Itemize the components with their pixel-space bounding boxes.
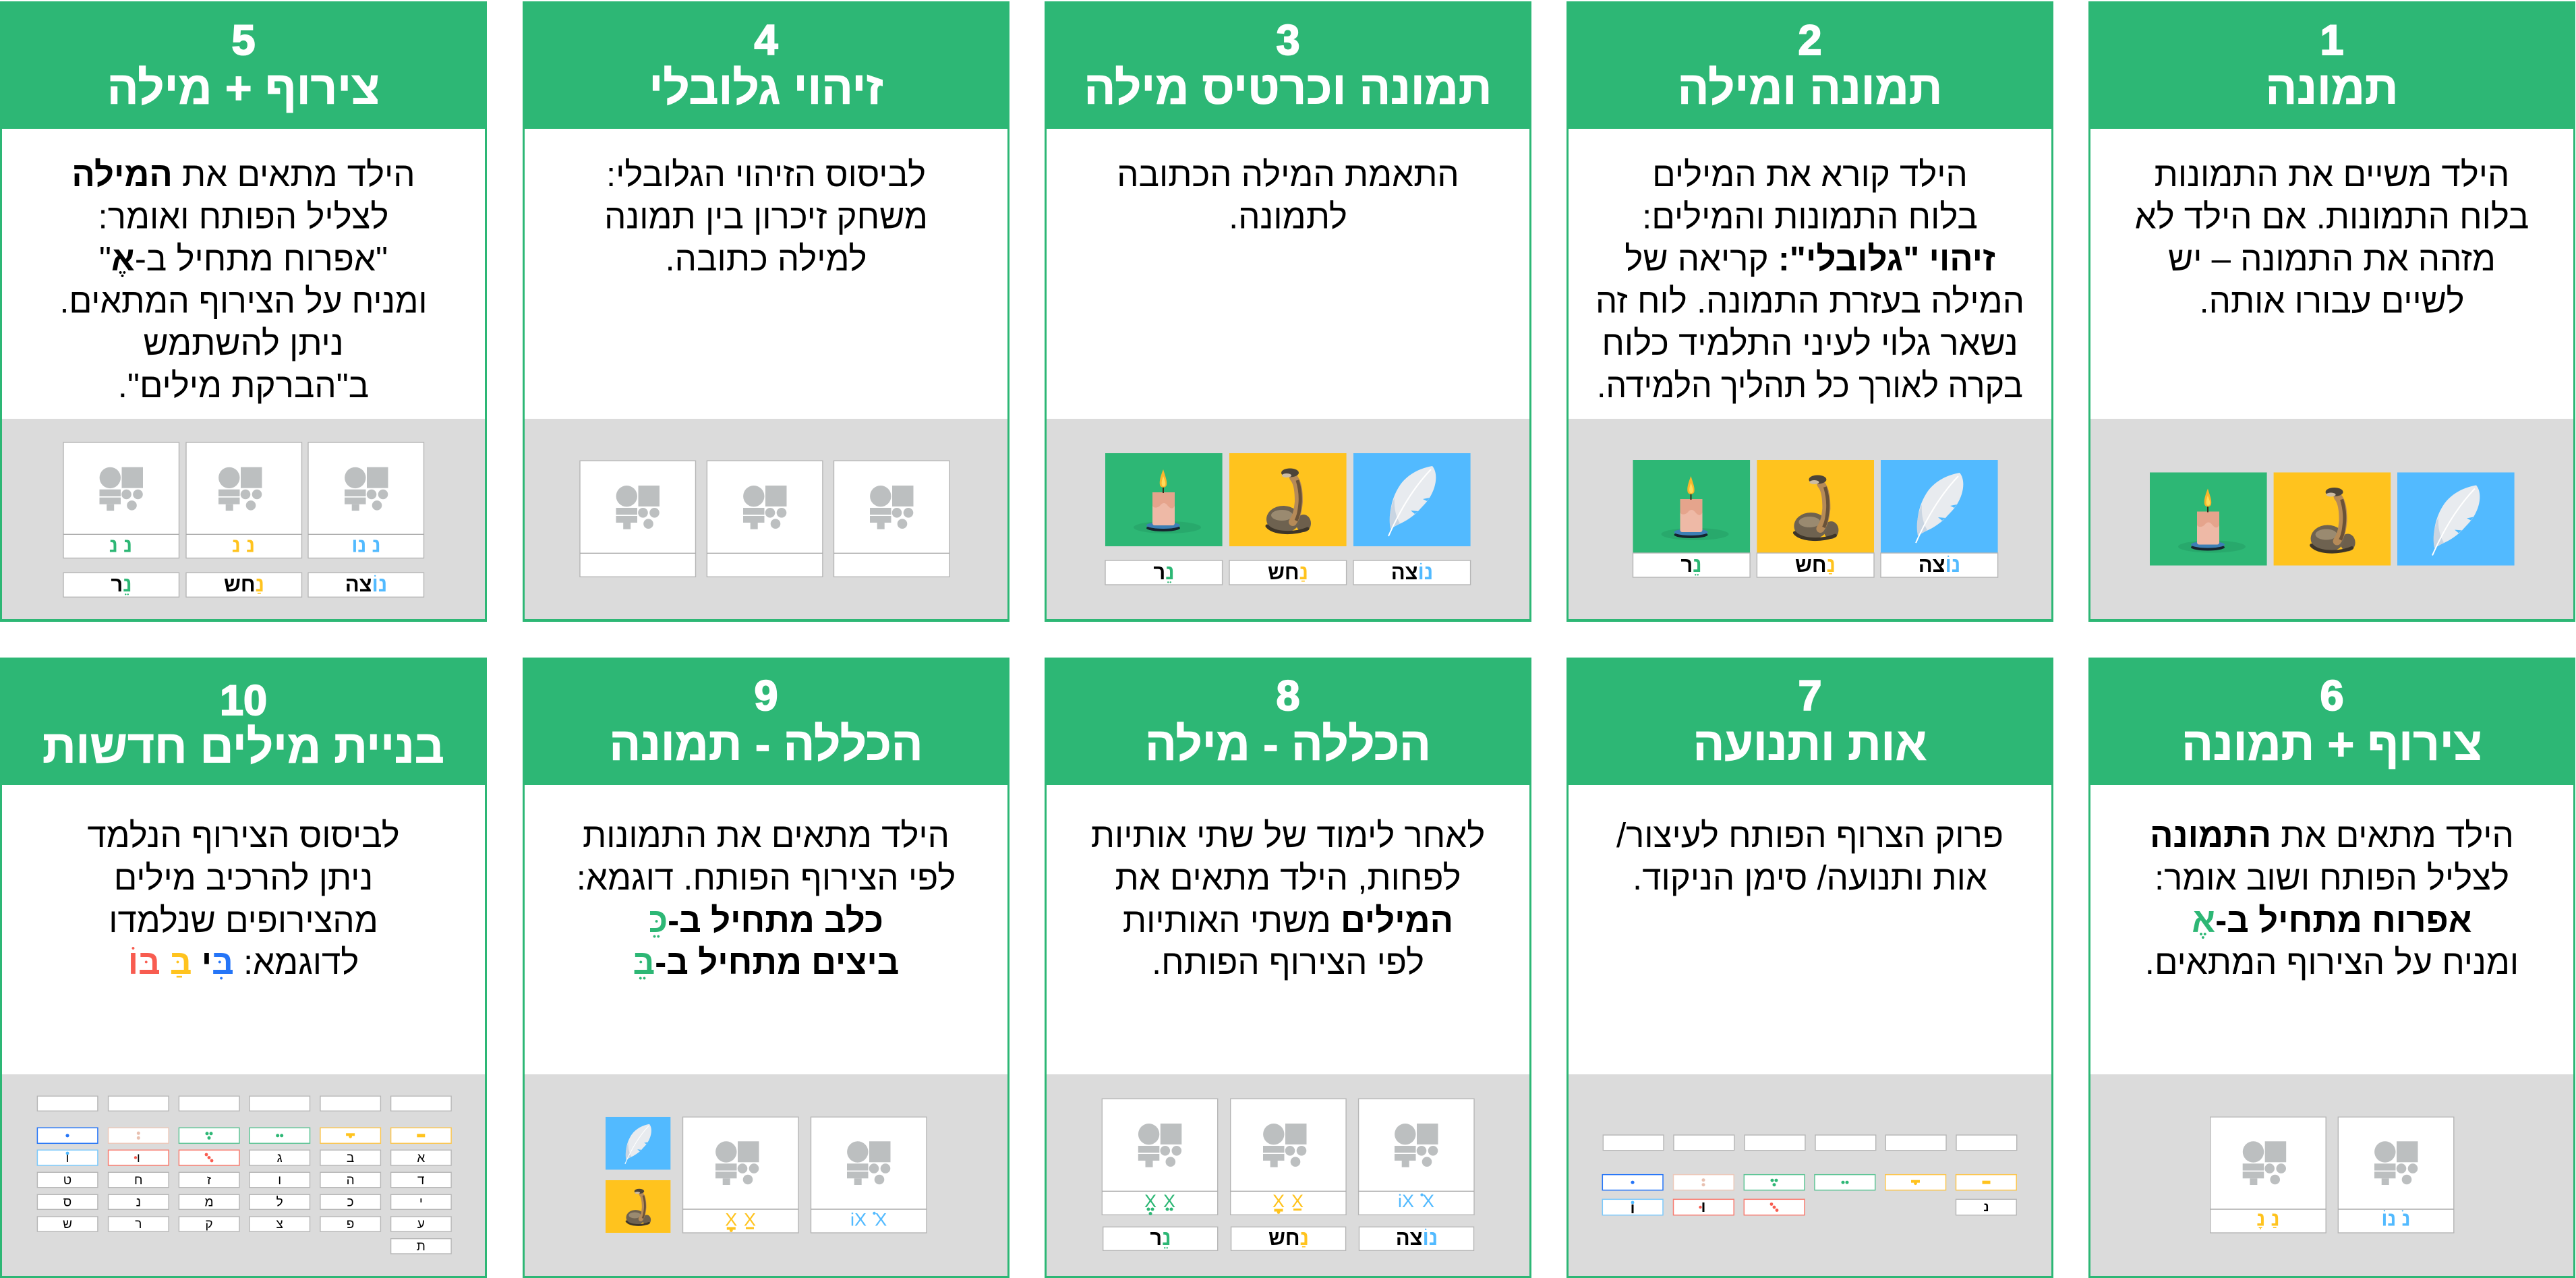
word card: snake: [1231, 1226, 1346, 1250]
step 9 description: כלב מתחיל ב-כֵּ: [649, 901, 883, 939]
syllable card yellow: X: [1291, 1191, 1304, 1211]
syllable card yellow: [2211, 1117, 2326, 1233]
alphabet tiles: מ: [204, 1195, 214, 1210]
picture: feather: [2397, 472, 2515, 565]
step 3 description: [1117, 155, 1459, 236]
alphabet tiles: ב: [347, 1151, 354, 1165]
step 1 description: לשיים עבורו אותה.: [2199, 282, 2465, 320]
word card: feather: נוֹצה: [345, 573, 387, 596]
step 4 description: משחק זיכרון בין תמונה: [604, 197, 928, 236]
step 2 description: [1596, 155, 2024, 405]
panel: step 2 picture and word: [1567, 1, 2053, 622]
step title: הכללה - תמונה: [609, 718, 923, 770]
step 6 description: ומניח על הצירוף המתאים.: [2145, 943, 2519, 981]
step 7 example area: [1569, 1074, 2051, 1276]
step title: הכללה - מילה: [1145, 718, 1431, 770]
step 1 description: הילד משיים את התמונות: [2155, 155, 2509, 194]
step 1 example area: [2090, 419, 2573, 619]
picture: snake: [2274, 472, 2391, 565]
alphabet tiles: ע: [417, 1217, 425, 1231]
vowel and letter tiles second row: נ: [1983, 1200, 1989, 1215]
empty slots row: [1603, 1135, 2017, 1151]
word card: snake: נַחש: [1268, 560, 1308, 584]
step 9 description: [577, 816, 956, 981]
word card: snake: נַחש: [1268, 1226, 1309, 1250]
step 10 header: [0, 658, 487, 785]
panel: step 5 syllable and word: [0, 1, 487, 622]
alphabet tiles: ו: [66, 1151, 69, 1165]
step 8 description: [1091, 816, 1485, 981]
alphabet tiles: ח: [134, 1173, 143, 1188]
memory card 1: [580, 461, 696, 577]
syllable card yellow: X: [744, 1210, 756, 1230]
word card: feather: נוֹצה: [1391, 560, 1433, 584]
syllable card blue: [1359, 1099, 1474, 1215]
memory card 3: [833, 461, 949, 577]
alphabet tiles: ש: [63, 1217, 72, 1231]
alphabet tiles: ז: [207, 1173, 211, 1188]
step 10 description: מהצירופים שנלמדו: [109, 901, 378, 939]
alphabet tiles: כ: [347, 1195, 354, 1210]
step 10 example area: [2, 1074, 485, 1276]
step 2 example area: [1569, 419, 2051, 619]
step title: תמונה: [2266, 62, 2398, 114]
step 4 example area: [525, 419, 1007, 619]
step 8 header: [1045, 658, 1531, 785]
step title: בניית מילים חדשות: [42, 721, 444, 773]
alphabet tiles: ק: [205, 1217, 213, 1231]
step 1 description: מזהה את התמונה – יש: [2168, 239, 2496, 278]
alphabet tiles: ה: [347, 1173, 355, 1188]
step 2 description: המילה בעזרת התמונה. לוח זה: [1596, 282, 2024, 320]
syllable card blue: [308, 442, 423, 558]
step 2 description: בקרה לאורך כל תהליך הלמידה.: [1597, 366, 2023, 405]
word card: candle: [1103, 1226, 1218, 1250]
syllable card yellow: נַ נָ: [2256, 1209, 2280, 1231]
alphabet tiles: צ: [276, 1217, 283, 1231]
step 5 description: הילד מתאים את המילה: [71, 155, 415, 194]
picture card: candle: [1633, 460, 1750, 577]
word card: candle: נֵר: [111, 573, 132, 596]
step number: 7: [1798, 672, 1822, 720]
syllable card blue: נ נו: [351, 534, 381, 556]
step title: אות ותנועה: [1693, 718, 1927, 770]
alphabet tiles: ל: [276, 1195, 283, 1210]
step 5 description: ב"הברקת מילים".: [118, 366, 369, 405]
step number: 5: [231, 17, 256, 64]
step 5 description: "אפרוח מתחיל ב-אֶ": [99, 239, 388, 278]
step 5 description: [59, 155, 428, 405]
syllable card yellow: נ נ: [232, 534, 255, 556]
step 3 description: לתמונה.: [1229, 197, 1347, 236]
alphabet tiles: א: [417, 1151, 425, 1165]
syllable card blue: [2338, 1117, 2454, 1233]
step 10 description: לדוגמא: בִּי בַּ בּוֹ: [128, 943, 359, 981]
syllable card blue: X: [875, 1210, 887, 1230]
step number: 10: [220, 677, 267, 724]
step 9 description: הילד מתאים את התמונות: [583, 816, 949, 854]
syllable card yellow: [682, 1117, 798, 1233]
step 6 description: הילד מתאים את התמונה: [2150, 816, 2514, 854]
step 4 description: [604, 155, 928, 278]
syllable card green: נ נ: [109, 534, 132, 556]
step title: תמונה ומילה: [1678, 62, 1942, 114]
alphabet tiles: [37, 1150, 451, 1254]
vowel tiles row: [1602, 1175, 2016, 1190]
syllable card green: [63, 442, 179, 558]
step 6 description: אפרוח מתחיל ב-אֶ: [2192, 901, 2472, 939]
syllable card yellow: X: [725, 1210, 737, 1230]
panel: step 9 generalisation picture: [523, 658, 1009, 1278]
step 9 example area: [525, 1074, 1007, 1276]
panel: step 4 global recognition: [523, 1, 1009, 622]
step number: 2: [1798, 17, 1822, 64]
panel: step 10 building new words: [0, 658, 487, 1278]
step 1 description: [2135, 155, 2529, 320]
alphabet tiles: ט: [63, 1173, 71, 1188]
word card: candle: נֵר: [1150, 1226, 1171, 1250]
step 7 description: [1616, 816, 2003, 897]
alphabet tiles: ס: [63, 1195, 71, 1210]
picture card: feather: [1881, 460, 1998, 577]
syllable card blue: נֹ נוֹ: [2381, 1209, 2411, 1231]
step title: צירוף + מילה: [107, 62, 380, 114]
step 3 example area: [1047, 419, 1529, 619]
alphabet tiles: פ: [347, 1217, 354, 1231]
step 8 description: המילים משתי האותיות: [1123, 901, 1453, 939]
step 3 header: [1045, 1, 1531, 129]
step 5 header: [0, 1, 487, 129]
picture card: snake: [1757, 460, 1874, 577]
step 4 description: למילה כתובה.: [665, 239, 867, 278]
step number: 8: [1276, 672, 1300, 720]
step 2 description: זיהוי "גלובלי": קריאה של: [1624, 239, 1995, 278]
word card: candle: [1105, 560, 1223, 585]
vowel and letter tiles second row: [1602, 1199, 2016, 1215]
step 8 description: לפחות, הילד מתאים את: [1115, 859, 1461, 897]
panel: step 6 syllable and picture: [2088, 658, 2575, 1278]
step 2 header: [1567, 1, 2053, 129]
picture: candle: [2150, 472, 2267, 565]
alphabet tiles: ו: [278, 1173, 281, 1188]
alphabet tiles: נ: [136, 1195, 141, 1210]
step 6 description: [2145, 816, 2519, 981]
memory card 2: [707, 461, 823, 577]
step 5 example area: [2, 419, 485, 619]
step 7 header: [1567, 658, 2053, 785]
alphabet tiles: ת: [417, 1240, 426, 1254]
step 1 header: [2088, 1, 2575, 129]
vowel tiles row: [37, 1128, 451, 1143]
word card: feather: [1353, 560, 1471, 585]
panel: step 3 picture and word card: [1045, 1, 1531, 622]
step 9 header: [523, 658, 1009, 785]
word card: snake: [1229, 560, 1347, 585]
syllable card blue: [811, 1117, 927, 1233]
syllable card blue: iX: [1398, 1191, 1414, 1211]
word card: candle: נֵר: [1153, 560, 1175, 584]
step number: 1: [2320, 17, 2344, 64]
syllable card blue: iX: [850, 1210, 867, 1230]
word card: feather: נוֹצה: [1396, 1226, 1438, 1250]
step title: זיהוי גלובלי: [649, 62, 883, 114]
step 7 description: אות ותנועה/ סימן הניקוד.: [1633, 859, 1987, 897]
step 5 description: לצליל הפותח ואומר:: [98, 197, 388, 236]
step 2 description: הילד קורא את המילים: [1652, 155, 1968, 194]
step 6 header: [2088, 658, 2575, 785]
step 8 description: לאחר לימוד של שתי אותיות: [1091, 816, 1485, 854]
step 6 description: לצליל הפותח ושוב אומר:: [2155, 859, 2509, 897]
alphabet tiles: ר: [135, 1217, 142, 1231]
step title: תמונה וכרטיס מילה: [1084, 62, 1492, 114]
step 5 description: ניתן להשתמש: [143, 324, 344, 362]
step number: 4: [754, 17, 778, 64]
step 8 example area: [1047, 1074, 1529, 1276]
alphabet tiles: ד: [417, 1173, 425, 1188]
step 9 description: לפי הצירוף הפותח. דוגמא:: [577, 859, 956, 897]
syllable card green: [1102, 1099, 1218, 1215]
word card: snake: [186, 573, 302, 597]
step number: 6: [2320, 672, 2344, 720]
syllable card green: X: [1144, 1191, 1157, 1211]
step 9 description: ביצים מתחיל ב-בֵּ: [633, 943, 899, 981]
step 2 description: בלוח התמונות והמילים:: [1642, 197, 1978, 236]
step 6 example area: [2090, 1074, 2573, 1276]
step 1 description: בלוח התמונות. אם הילד לא: [2135, 197, 2529, 236]
panel: step 1 picture: [2088, 1, 2575, 622]
panel: step 7 letter and vowel: [1567, 658, 2053, 1278]
syllable card yellow: [186, 442, 302, 558]
word card: candle: [63, 573, 179, 597]
word card: feather: [308, 573, 423, 597]
syllable card blue: X: [1422, 1191, 1434, 1211]
step 4 description: לביסוס הזיהוי הגלובלי:: [606, 155, 926, 194]
panel: step 8 generalisation word: [1045, 658, 1531, 1278]
picture: feather: [606, 1117, 670, 1169]
picture card: feather: נוֹצה: [1919, 553, 1960, 577]
step 3 description: התאמת המילה הכתובה: [1117, 155, 1459, 194]
step 10 description: [87, 816, 400, 981]
step 10 description: לביסוס הצירוף הנלמד: [87, 816, 400, 854]
syllable card yellow: X: [1272, 1191, 1285, 1211]
picture: snake: [1229, 453, 1347, 546]
picture: candle: [1105, 453, 1223, 546]
picture: snake: [606, 1180, 670, 1233]
step 8 description: לפי הצירוף הפותח.: [1152, 943, 1424, 981]
alphabet tiles: י: [419, 1195, 423, 1210]
step title: צירוף + תמונה: [2182, 718, 2482, 770]
step 2 description: נשאר גלוי לעיני התלמיד כלוח: [1602, 324, 2018, 362]
step 7 description: פרוק הצרוף הפותח לעיצור/: [1616, 816, 2003, 854]
step 10 description: ניתן להרכיב מילים: [114, 859, 373, 897]
picture card: snake: נַחש: [1795, 553, 1836, 577]
picture card: candle: נֵר: [1680, 553, 1702, 577]
syllable card yellow: [1231, 1099, 1346, 1215]
empty slots row: [37, 1096, 451, 1111]
step number: 9: [754, 672, 778, 720]
word card: snake: נַחש: [224, 573, 264, 596]
step number: 3: [1276, 17, 1300, 64]
picture: feather: [1353, 453, 1471, 546]
word card: feather: [1359, 1226, 1474, 1250]
step 4 header: [523, 1, 1009, 129]
alphabet tiles: ג: [277, 1151, 283, 1165]
syllable card green: X: [1163, 1191, 1175, 1211]
step 5 description: ומניח על הצירוף המתאים.: [59, 282, 428, 320]
alphabet tiles: ו: [137, 1151, 140, 1165]
